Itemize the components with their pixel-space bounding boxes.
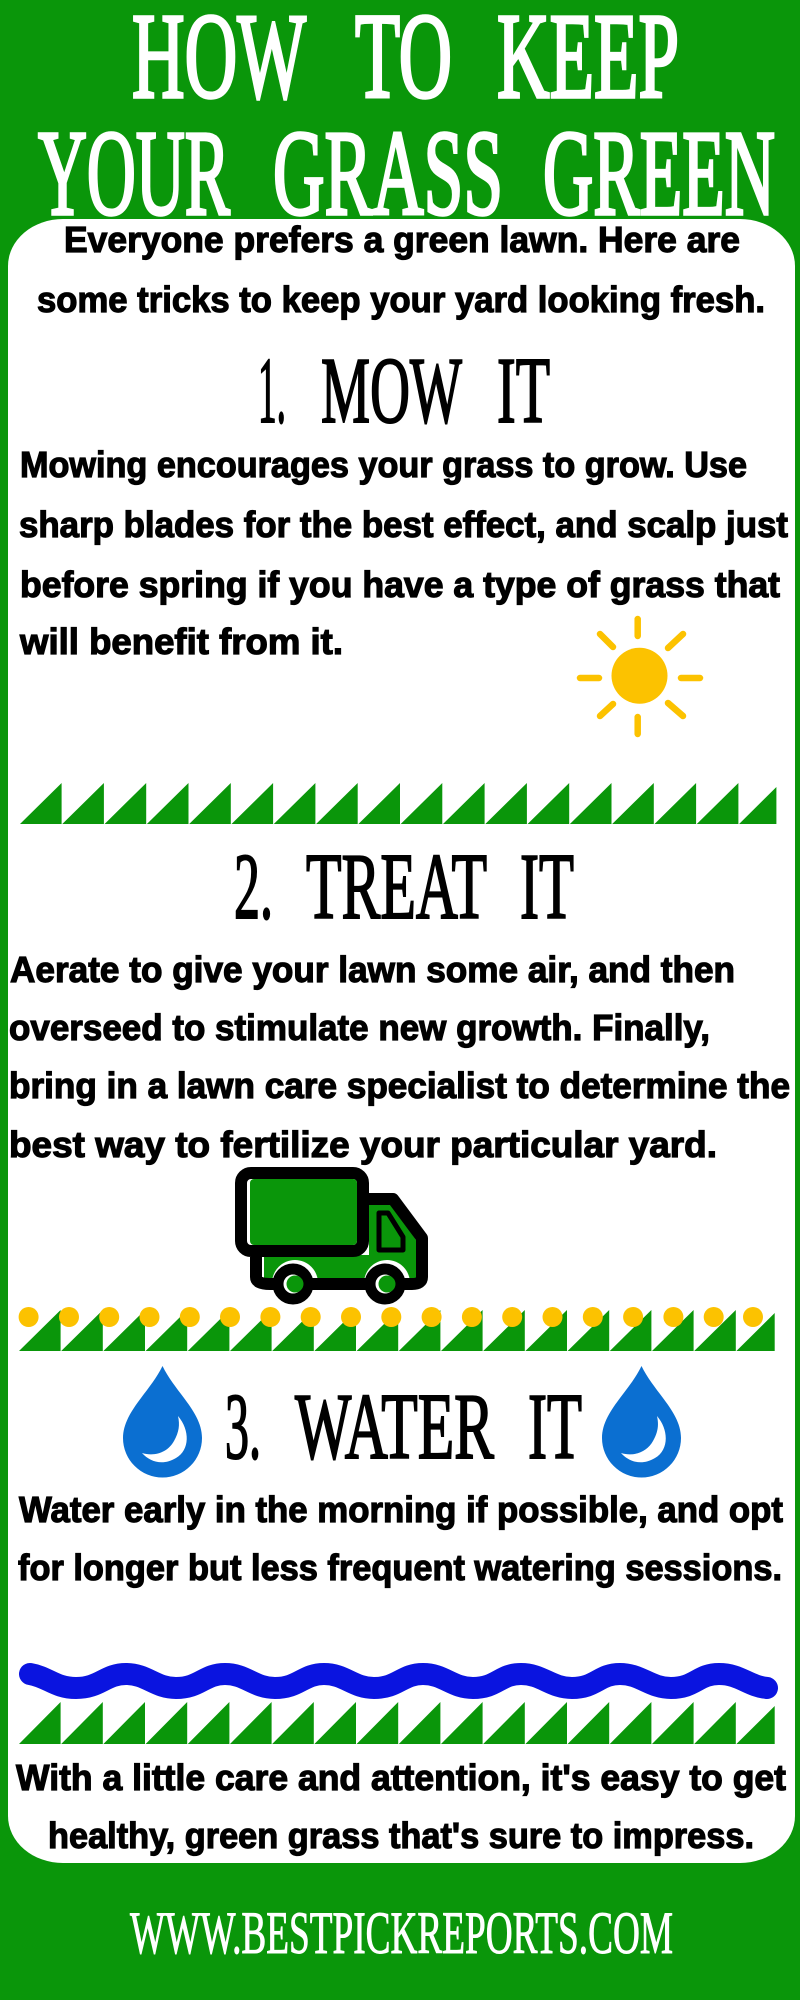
mow it body text: will benefit from it.	[19, 621, 343, 662]
title: GRASS	[273, 106, 503, 241]
heading: 2. treat it: 2.	[234, 835, 273, 939]
closing text: healthy, green grass that's sure to impress.	[48, 1815, 754, 1856]
treat it body text: best way to fertilize your particular yard.	[9, 1124, 717, 1165]
treat it body text: Aerate to give your lawn some air, and then	[10, 949, 735, 990]
heading: 2. treat it: TREAT	[306, 835, 487, 939]
heading: 3. water it: WATER	[295, 1375, 494, 1479]
title: YOUR	[38, 106, 230, 241]
mow it body text: Mowing encourages your grass to grow. Use	[20, 444, 747, 485]
intro text	[37, 219, 765, 320]
treat it body text	[9, 949, 790, 1165]
section: treat it	[9, 835, 790, 1351]
section: water it	[18, 1366, 783, 1744]
icon: sun	[580, 619, 700, 734]
heading: 1. mow it: 1.	[258, 339, 286, 443]
icon: right water drop	[602, 1366, 681, 1478]
treat it body text: bring in a lawn care specialist to determine the	[9, 1065, 790, 1106]
intro text: some tricks to keep your yard looking fresh.	[37, 279, 765, 320]
mow it body text: before spring if you have a type of grass that	[20, 564, 780, 605]
closing text	[16, 1757, 786, 1856]
closing text: With a little care and attention, it's easy to get	[16, 1757, 786, 1798]
mow it body text: sharp blades for the best effect, and scalp just	[19, 504, 788, 545]
icon: truck	[241, 1173, 422, 1306]
heading: 3. water it: 3.	[225, 1375, 261, 1479]
section: mow it	[19, 339, 788, 824]
grass border	[20, 783, 776, 824]
grass border with yellow flowers	[19, 1307, 775, 1351]
grass border	[19, 1702, 775, 1744]
title	[38, 0, 775, 241]
blue water wave	[30, 1674, 767, 1688]
water it body text	[18, 1489, 783, 1588]
water it body text: for longer but less frequent watering sessions.	[18, 1547, 782, 1588]
intro text: Everyone prefers a green lawn. Here are	[64, 219, 740, 260]
heading: 1. mow it: MOW	[321, 339, 462, 443]
water it body text: Water early in the morning if possible, and opt	[19, 1489, 783, 1530]
heading: 2. treat it: IT	[520, 835, 574, 939]
heading: 1. mow it: IT	[497, 339, 550, 443]
icon: left water drop	[123, 1366, 202, 1478]
treat it body text: overseed to stimulate new growth. Finally,	[9, 1007, 710, 1048]
mow it body text	[19, 444, 788, 662]
heading: 3. water it: IT	[528, 1375, 582, 1479]
